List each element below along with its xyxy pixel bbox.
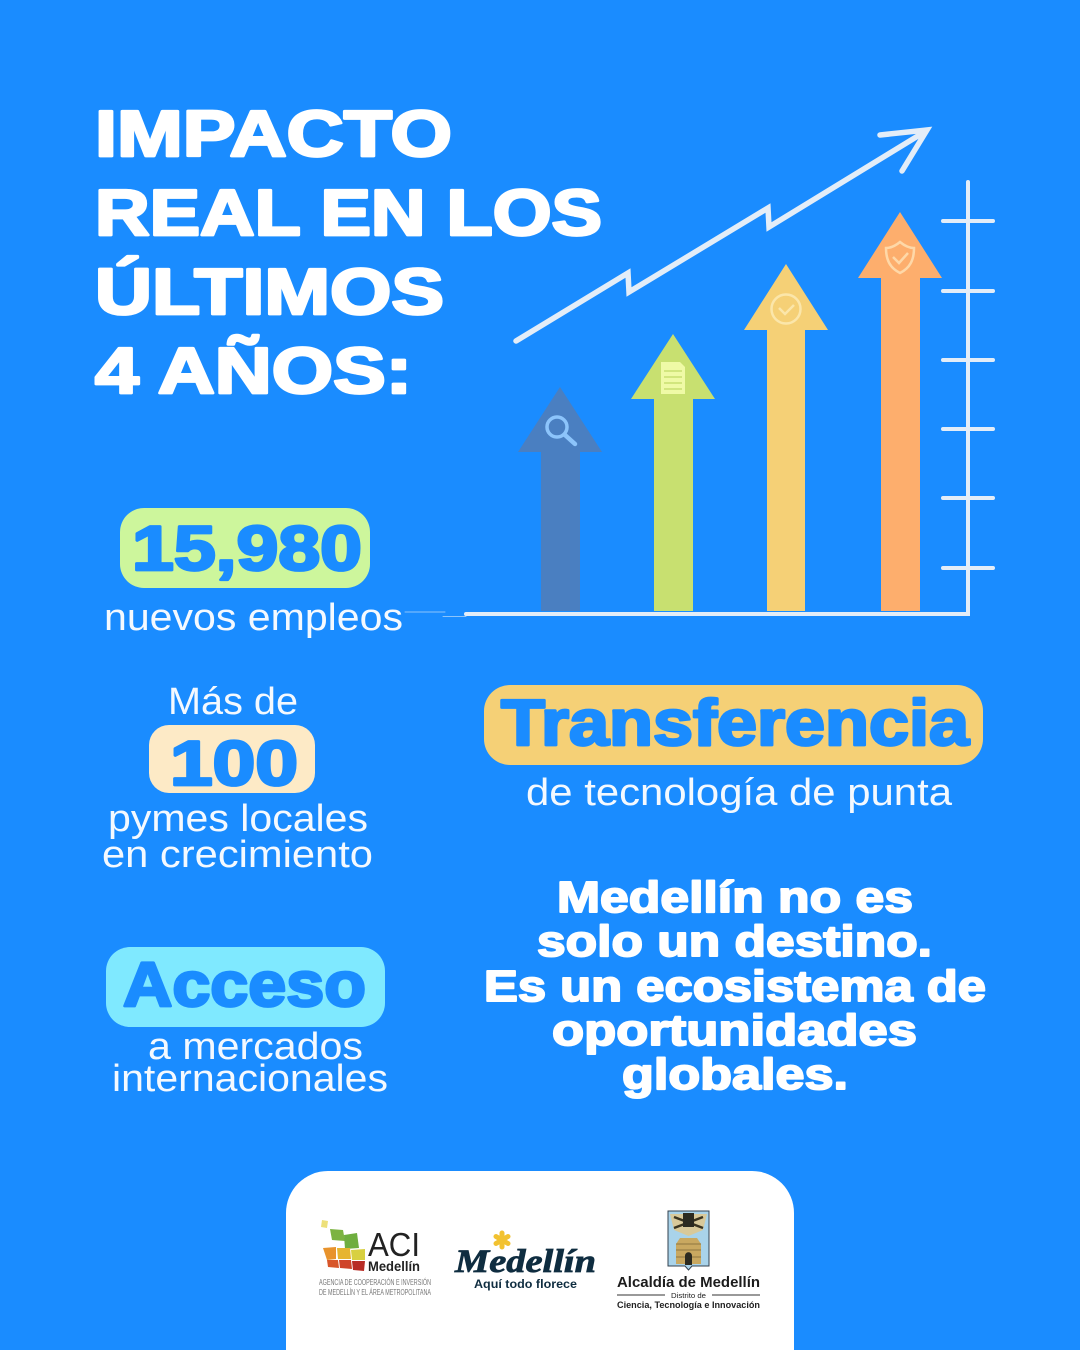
stat: 15,980 nuevos empleos	[104, 508, 403, 639]
stat: más de 100 pymes: pymes locales	[108, 798, 368, 840]
title: IMPACTO	[95, 97, 452, 170]
closing statement: oportunidades	[552, 1006, 917, 1055]
stat: transferencia de tecnología: Transferencia	[501, 686, 970, 759]
arrow bar 2: document	[631, 334, 715, 611]
title: ÚLTIMOS	[95, 255, 444, 328]
stat: más de 100 pymes: en crecimiento	[102, 834, 373, 876]
title	[95, 97, 602, 407]
title: REAL EN LOS	[95, 176, 602, 249]
arrow bar 1: search	[518, 387, 602, 611]
trend arrow	[516, 130, 927, 341]
stat: acceso a mercados	[106, 947, 388, 1100]
logo: Alcaldía de Medellín: Alcaldía de Medellín	[617, 1274, 760, 1291]
arrow bar 4: shield	[858, 212, 942, 611]
logo: ACI Medellín: ACI	[368, 1226, 420, 1263]
stat: acceso a mercados: Acceso	[123, 950, 366, 1020]
closing statement: Medellín no es	[557, 873, 913, 922]
logo: Alcaldía de Medellín: Ciencia, Tecnología e Innovación	[617, 1300, 760, 1311]
arrow bar 3: check circle	[744, 264, 828, 611]
logo: Medellín Aquí todo florece: Medellín	[454, 1244, 596, 1280]
logo: Medellín Aquí todo florece: Aquí todo florece	[474, 1279, 577, 1291]
closing statement: globales.	[622, 1050, 848, 1099]
title: 4 AÑOS:	[95, 334, 412, 407]
stat: acceso a mercados: a mercados	[148, 1026, 363, 1068]
stat: más de 100 pymes: 100	[170, 729, 298, 799]
chart: rising arrows	[405, 130, 993, 616]
logo: ACI Medellín	[319, 1220, 431, 1297]
stat: transferencia de tecnología	[484, 685, 983, 814]
closing statement: solo un destino.	[537, 917, 932, 966]
logo: ACI Medellín: DE MEDELLÍN Y EL ÁREA METROPOLITANA	[319, 1288, 431, 1297]
stat: 15,980 nuevos empleos: 15,980	[132, 514, 362, 584]
stat: acceso a mercados: internacionales	[112, 1058, 388, 1100]
logo: Medellín Aquí todo florece	[454, 1233, 596, 1291]
logo: ACI Medellín: Medellín	[368, 1258, 420, 1274]
chart axes	[405, 182, 993, 616]
stat: 15,980 nuevos empleos: nuevos empleos	[104, 597, 403, 639]
stat: más de 100 pymes: Más de	[168, 681, 298, 723]
closing statement	[484, 873, 986, 1099]
logo: ACI Medellín: AGENCIA DE COOPERACIÓN E INVERSIÓN	[319, 1278, 431, 1287]
stat: transferencia de tecnología: de tecnología de punta	[526, 772, 953, 814]
stat: más de 100 pymes	[102, 681, 373, 876]
logo: Alcaldía de Medellín: Distrito de	[671, 1291, 706, 1300]
logo panel	[286, 1171, 794, 1350]
logo: Alcaldía de Medellín	[617, 1211, 760, 1311]
closing statement: Es un ecosistema de	[484, 962, 986, 1011]
